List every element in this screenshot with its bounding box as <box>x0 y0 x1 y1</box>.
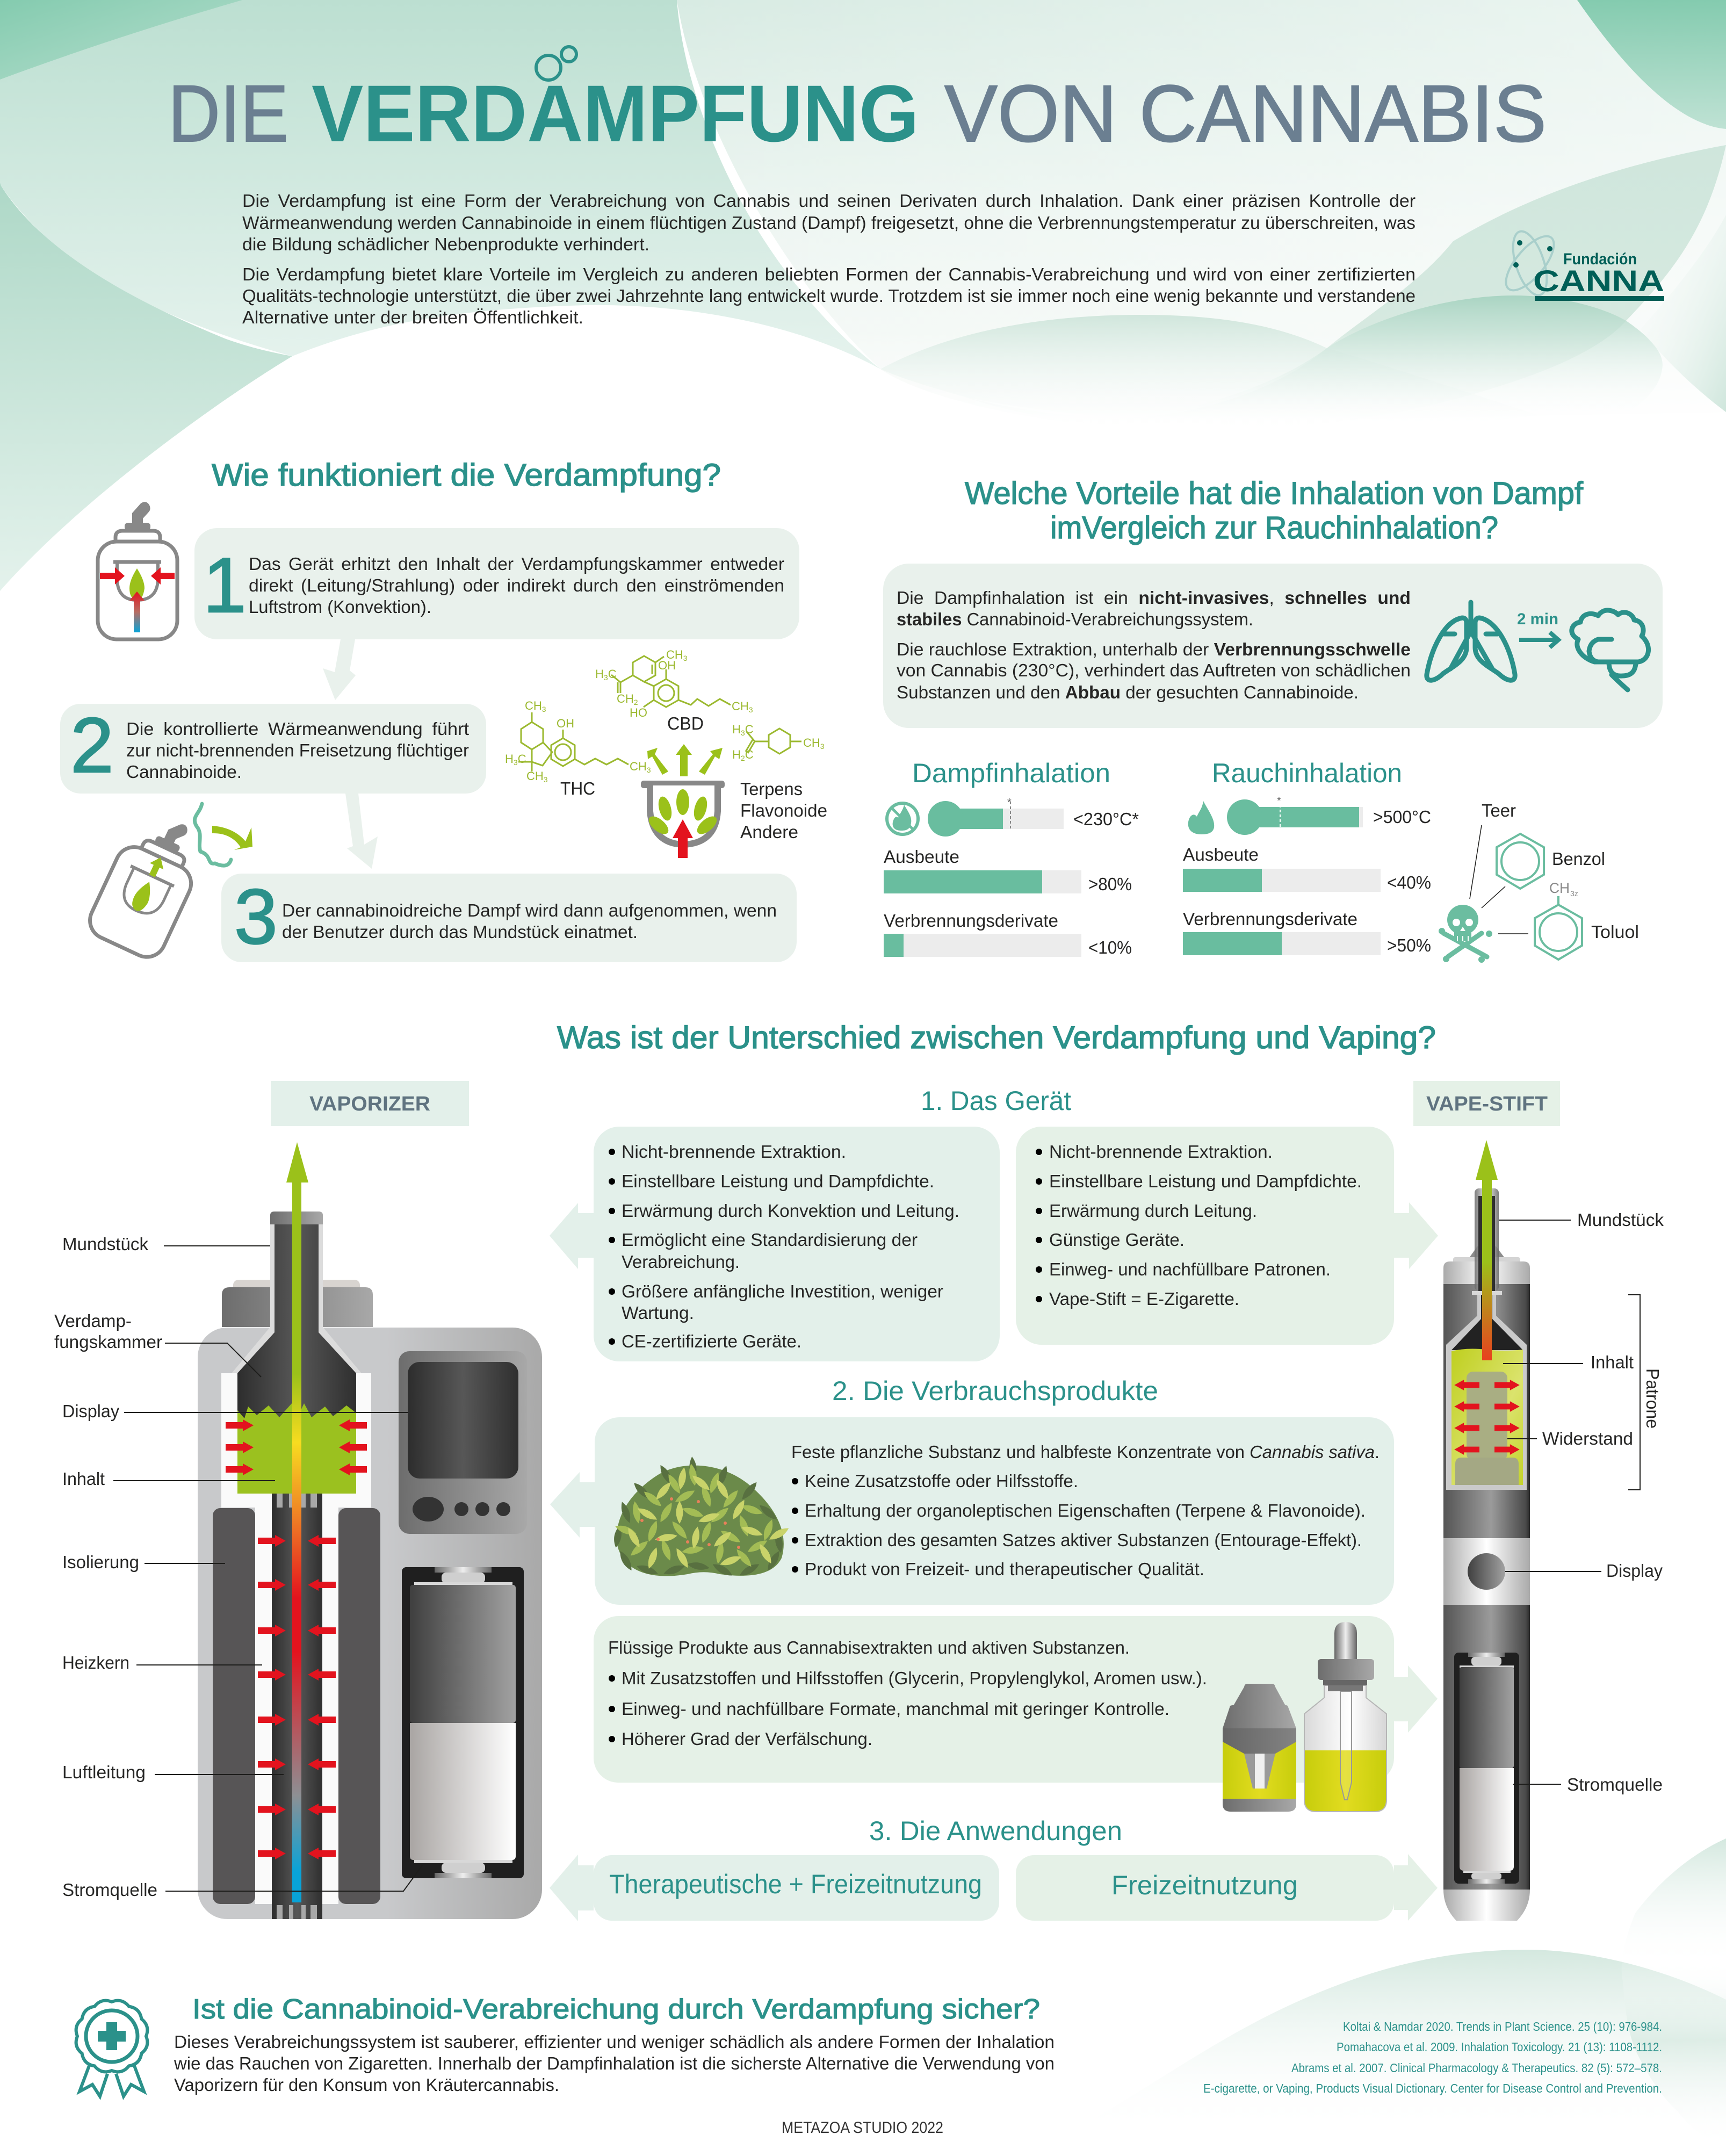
title <box>168 68 1547 158</box>
panel: liquid products: Höherer Grad der Verfälschung. <box>622 1729 872 1749</box>
vape pen part labels: Stromquelle <box>1567 1775 1663 1794</box>
molecule: CBD: 3 <box>604 673 608 682</box>
panel: step 1: Das Gerät erhitzt den Inhalt der Verdampfungskammer entweder <box>249 554 784 574</box>
panel: vapour inhalation advantages: Die Dampfinhalation ist ein nicht-invasives, schnelles und <box>897 588 1411 608</box>
heading: advantages: imVergleich zur Rauchinhalation? <box>1050 510 1498 545</box>
chart: Dampfinhalation: * <box>1007 797 1012 809</box>
arrow: air flow <box>286 1142 308 1902</box>
heading: advantages <box>965 476 1584 545</box>
labels: toxic compounds: Teer <box>1482 801 1516 820</box>
panel: vaporizer device features: Nicht-brennende Extraktion. <box>622 1142 846 1162</box>
panel: step 1 <box>194 528 799 639</box>
intro text: Wärmeanwendung werden Cannabinoide in einem flüchtigen Zustand (Dampf) freigesetzt, ohne die Verbrennungstemperatur zu überschreiten, was <box>242 213 1416 233</box>
labels: toxic compounds <box>1470 801 1639 960</box>
molecule: terpene <box>732 723 825 762</box>
molecule: CBD: CH <box>732 700 749 713</box>
icon: safety badge <box>76 2001 147 2096</box>
vaporizer part labels: Mundstück <box>62 1234 148 1254</box>
panel: vaporizer device features: Verabreichung. <box>622 1252 740 1272</box>
panel: step 1: 1 <box>203 542 247 629</box>
icon: no flame <box>887 803 918 834</box>
logo: Fundación CANNA: Fundación <box>1563 250 1637 268</box>
panel: step 3: Der cannabinoidreiche Dampf wird dann aufgenommen, wenn <box>282 900 777 920</box>
panel: herbal products <box>595 1417 1394 1605</box>
vaporizer part labels: Inhalt <box>62 1469 105 1489</box>
panel: step 2: 2 <box>70 702 114 789</box>
vaporizer part labels: fungskammer <box>54 1332 162 1352</box>
chart: Dampfinhalation: Verbrennungsderivate <box>884 911 1058 931</box>
intro text: Die Verdampfung ist eine Form der Verabreichung von Cannabis und seinen Derivaten durch Inhalation. Dank einer präzisen Kontrolle der <box>242 191 1416 211</box>
diagram: vape pen <box>1443 1140 1530 1921</box>
vape pen part labels <box>1499 1210 1664 1794</box>
panel: vape pen device features: Einstellbare Leistung und Dampfdichte. <box>1049 1171 1362 1191</box>
panel: vape pen device features <box>1016 1127 1394 1345</box>
panel: vapour inhalation advantages: Die rauchlose Extraktion, unterhalb der Verbrennungsschwelle <box>897 639 1411 659</box>
panel: vape pen device features: Einweg- und nachfüllbare Patronen. <box>1049 1259 1331 1279</box>
molecule: THC: THC <box>560 778 595 798</box>
chart: Rauchinhalation: * <box>1277 795 1281 807</box>
cartridge <box>1446 1295 1527 1490</box>
molecule: THC: CH <box>525 699 542 712</box>
panel: vaporizer device features: Erwärmung durch Konvektion und Leitung. <box>622 1201 959 1221</box>
molecule: THC: CH <box>630 760 647 773</box>
vaporizer part labels: Stromquelle <box>62 1880 157 1900</box>
icon: vapour bubbles <box>536 47 576 80</box>
molecule: THC: 3 <box>647 766 651 774</box>
vape pen part labels: Display <box>1606 1561 1663 1581</box>
diagram: vaporizer <box>198 1142 542 1919</box>
molecule: terpene: H <box>732 723 741 736</box>
title: DIE <box>168 68 288 158</box>
molecule: CBD: HO <box>630 706 647 719</box>
arrow: step 2 to 3 <box>345 794 378 869</box>
arrow: application vaporizer <box>550 1855 594 1921</box>
panel: vapour inhalation advantages: Substanzen und den Abbau der gesuchten Cannabinoide. <box>897 682 1359 702</box>
panel: vapour inhalation advantages <box>883 564 1663 728</box>
chart: Dampfinhalation: <10% <box>1088 938 1132 957</box>
panel: vaporizer device features: Ermöglicht eine Standardisierung der <box>622 1230 918 1250</box>
molecule: terpene: 3 <box>820 742 825 751</box>
illustration: vape cartridge <box>1223 1684 1296 1812</box>
icon: flame <box>1188 801 1214 834</box>
vaporizer part labels: Verdamp- <box>54 1311 132 1331</box>
arrow: device vaporizer <box>550 1203 594 1269</box>
panel: step 3 <box>221 873 797 962</box>
panel: herbal products: Produkt von Freizeit- und therapeutischer Qualität. <box>805 1559 1204 1579</box>
labels: other compounds: Andere <box>740 822 798 842</box>
panel: herbal products: Feste pflanzliche Substanz und halbfeste Konzentrate von Cannabis sativa. <box>791 1442 1380 1462</box>
heading: consumables: 2. Die Verbrauchsprodukte <box>832 1376 1158 1406</box>
molecule: THC: C <box>518 752 526 766</box>
chart: Rauchinhalation: Verbrennungsderivate <box>1183 909 1357 929</box>
heat arrows <box>1454 1380 1520 1455</box>
background: bottom right waves <box>1095 1838 1726 2149</box>
battery <box>402 1567 524 1878</box>
labels: toxic compounds: CH <box>1549 880 1570 896</box>
tag: vaporizer: VAPORIZER <box>309 1093 430 1115</box>
molecule: terpene: 2 <box>741 754 745 762</box>
title: VON CANNABIS <box>944 68 1547 158</box>
intro text: Die Verdampfung bietet klare Vorteile im Vergleich zu anderen beliebten Formen der Cannabis-Verabreichung und wird von einer zertifizierten <box>242 264 1416 284</box>
vaporizer part labels: Heizkern <box>62 1653 129 1672</box>
molecule: CBD: CH <box>617 692 634 705</box>
chart: Rauchinhalation: >500°C <box>1373 807 1431 827</box>
molecule: terpene: H <box>732 748 741 761</box>
illustration: dropper bottle <box>1304 1622 1386 1812</box>
panel: liquid products <box>594 1616 1394 1783</box>
heat arrows <box>226 1419 367 1859</box>
text: safety answer: wie das Rauchen von Zigaretten. Innerhalb der Dampfinhalation ist die sicherste Alternative die Verwendung von <box>174 2053 1055 2073</box>
molecule: THC: CH <box>526 769 544 783</box>
panel: vape pen device features: Nicht-brennende Extraktion. <box>1049 1142 1273 1162</box>
molecule: terpene: C <box>745 723 754 736</box>
display unit <box>399 1351 527 1534</box>
heading: difference: Was ist der Unterschied zwischen Verdampfung und Vaping? <box>557 1020 1436 1055</box>
text: safety answer <box>174 2032 1055 2095</box>
panel: vapour inhalation advantages: von Cannabis (230°C), verhindert das Auftreten von schädlichen <box>897 660 1411 680</box>
heading: the device: 1. Das Gerät <box>921 1086 1071 1116</box>
chart: Rauchinhalation <box>1183 758 1431 955</box>
vape pen part labels: Inhalt <box>1591 1352 1634 1372</box>
vape pen part labels: Mundstück <box>1577 1210 1664 1230</box>
molecule: CBD: CBD <box>667 713 704 733</box>
labels: other compounds: Terpens <box>740 779 803 799</box>
panel: vaporizer device features: CE-zertifizierte Geräte. <box>622 1331 801 1351</box>
panel: vapour inhalation advantages: stabiles Cannabinoid-Verabreichungssystem. <box>897 609 1253 629</box>
vaporizer part labels: Isolierung <box>62 1552 139 1572</box>
logo: Fundación CANNA: CANNA <box>1533 264 1664 298</box>
panel: liquid products: Flüssige Produkte aus Cannabisextrakten und aktiven Substanzen. <box>608 1638 1130 1657</box>
arrow: application vape pen <box>1394 1854 1438 1921</box>
icon: brain <box>1572 610 1649 690</box>
labels: other compounds: Flavonoide <box>740 801 827 820</box>
references: Abrams et al. 2007. Clinical Pharmacology & Therapeutics. 82 (5): 572–578. <box>1291 2061 1662 2075</box>
chart: Dampfinhalation <box>884 758 1139 957</box>
molecule: CBD <box>595 648 753 733</box>
chart: Dampfinhalation: Ausbeute <box>884 847 959 867</box>
labels: toxic compounds: Benzol <box>1552 849 1605 869</box>
intro text: Qualitäts-technologie unterstützt, die über zwei Jahrzehnte lang entwickelt wurde. Trotzdem ist sie immer noch eine wenig bekannte und verstandene <box>242 286 1416 306</box>
arrow: step 1 to 2 <box>323 639 356 700</box>
molecule: CBD: H <box>595 667 604 681</box>
label: 2 min arrow: 2 min <box>1517 610 1558 628</box>
molecule: terpene: CH <box>803 736 820 749</box>
chart: Rauchinhalation: >50% <box>1387 935 1431 955</box>
molecule: CBD: 2 <box>634 698 638 706</box>
panel: vaporizer device features: Einstellbare Leistung und Dampfdichte. <box>622 1171 934 1191</box>
arrow: device vape pen <box>1394 1202 1438 1269</box>
panel: recreational use <box>1016 1855 1394 1921</box>
intro text <box>242 191 1416 327</box>
molecule: THC: 3 <box>544 775 548 784</box>
panel: step 3: 3 <box>234 873 278 960</box>
chart: Rauchinhalation: Ausbeute <box>1183 845 1259 864</box>
molecule: CBD: 3 <box>683 654 688 662</box>
panel: vape pen device features: Vape-Stift = E-Zigarette. <box>1049 1289 1239 1309</box>
intro text: Alternative unter der breiten Öffentlichkeit. <box>242 307 583 327</box>
panel: vaporizer device features: Größere anfängliche Investition, weniger <box>622 1281 943 1301</box>
illustration: cannabis bush <box>612 1456 790 1578</box>
icon: heated bowl with rising compounds <box>641 744 725 858</box>
panel: herbal products: Erhaltung der organoleptischen Eigenschaften (Terpene & Flavonoide). <box>805 1501 1366 1520</box>
vaporizer part labels <box>54 1234 422 1900</box>
references: Pomahacova et al. 2009. Inhalation Toxicology. 21 (13): 1108-1112. <box>1337 2040 1662 2054</box>
text: safety answer: Dieses Verabreichungssystem ist sauberer, effizienter und weniger schädlich als andere Formen der Inhalation <box>174 2032 1055 2052</box>
arrow: liquid product <box>1394 1665 1438 1733</box>
text: safety answer: Vaporizern für den Konsum von Kräutercannabis. <box>174 2075 559 2095</box>
molecule: CBD: 3 <box>749 705 753 714</box>
molecule: THC: 3 <box>542 705 546 713</box>
panel: vaporizer device features <box>594 1127 1000 1361</box>
battery <box>1454 1653 1519 1884</box>
molecule: THC: H <box>505 752 514 766</box>
molecule: THC: 3 <box>514 758 518 767</box>
heading: is it safe: Ist die Cannabinoid-Verabreichung durch Verdampfung sicher? <box>192 1994 1040 2025</box>
chart: Dampfinhalation: Dampfinhalation <box>912 758 1110 788</box>
molecule: CBD: OH <box>658 659 676 672</box>
panel: step 2 <box>60 702 486 794</box>
references: Koltai & Namdar 2020. Trends in Plant Science. 25 (10): 976-984. <box>1343 2020 1662 2034</box>
molecule: CBD: CH <box>666 648 683 661</box>
icon: vaporizer heating <box>98 502 177 639</box>
labels: other compounds <box>740 779 827 842</box>
tag: vape pen <box>1413 1081 1560 1126</box>
chart: Rauchinhalation: Rauchinhalation <box>1212 758 1402 788</box>
labels: toxic compounds: Toluol <box>1591 922 1639 942</box>
vaporizer part labels: Luftleitung <box>62 1762 146 1782</box>
panel: vaporizer device features: Wartung. <box>622 1303 694 1323</box>
panel: step 2: Die kontrollierte Wärmeanwendung führt <box>126 719 469 739</box>
logo: Fundación CANNA <box>1498 227 1664 301</box>
heading: how it works: Wie funktioniert die Verdampfung? <box>212 458 721 493</box>
chart: Dampfinhalation: <230°C* <box>1073 809 1139 829</box>
tag: vaporizer <box>271 1081 469 1126</box>
panel: liquid products: Einweg- und nachfüllbare Formate, manchmal mit geringer Kontrolle. <box>622 1699 1169 1719</box>
panel: step 3: der Benutzer durch das Mundstück einatmet. <box>282 922 638 942</box>
panel: therapeutic and recreational use <box>594 1855 999 1921</box>
molecule: terpene: 3 <box>741 729 745 737</box>
panel: vape pen device features: Günstige Geräte. <box>1049 1230 1185 1250</box>
content: plant material <box>237 1402 356 1494</box>
label: 2 min arrow <box>1517 610 1558 647</box>
vaporizer part labels: Display <box>62 1401 119 1421</box>
molecule: CBD: C <box>608 667 617 681</box>
panel: step 1: Luftstrom (Konvektion). <box>249 597 431 617</box>
molecule: THC <box>505 699 651 798</box>
vape pen part labels: Patrone <box>1643 1368 1663 1429</box>
molecule: terpene: C <box>745 748 754 761</box>
heading: applications: 3. Die Anwendungen <box>869 1816 1122 1846</box>
panel: recreational use: Freizeitnutzung <box>1111 1870 1298 1900</box>
molecule: THC: OH <box>557 717 574 730</box>
panel: vape pen device features: Erwärmung durch Leitung. <box>1049 1201 1257 1221</box>
chart: Rauchinhalation: <40% <box>1387 873 1431 892</box>
intro text: die Bildung schädlicher Nebenprodukte verhindert. <box>242 234 649 254</box>
icon: lungs <box>1427 602 1515 680</box>
references <box>1203 2020 1662 2095</box>
panel: step 2: zur nicht-brennenden Freisetzung flüchtiger <box>126 740 469 760</box>
background: top green waves <box>0 0 1726 591</box>
panel: step 2: Cannabinoide. <box>126 762 242 782</box>
icon: skull and crossbones <box>1439 905 1492 963</box>
tag: vape pen: VAPE-STIFT <box>1426 1093 1548 1115</box>
credit: METAZOA STUDIO 2022 <box>782 2119 943 2137</box>
panel: herbal products: Extraktion des gesamten Satzes aktiver Substanzen (Entourage-Effekt). <box>805 1530 1362 1550</box>
labels: toxic compounds: 3z <box>1570 889 1578 898</box>
panel: step 1: direkt (Leitung/Strahlung) oder indirekt durch den einströmenden <box>249 575 784 595</box>
icon: inhaling device <box>84 804 252 963</box>
chart: Dampfinhalation: >80% <box>1088 874 1132 894</box>
heading: advantages: Welche Vorteile hat die Inhalation von Dampf <box>965 476 1584 511</box>
vape pen part labels: Widerstand <box>1542 1429 1633 1448</box>
title: VERDAMPFUNG <box>312 68 919 158</box>
panel: therapeutic and recreational use: Therapeutische + Freizeitnutzung <box>609 1869 982 1899</box>
panel: herbal products: Keine Zusatzstoffe oder Hilfsstoffe. <box>805 1471 1078 1491</box>
arrow: herbal product <box>550 1472 595 1538</box>
arrow: vapour flow <box>1476 1140 1498 1360</box>
panel: liquid products: Mit Zusatzstoffen und Hilfsstoffen (Glycerin, Propylenglykol, Aromen usw.). <box>622 1668 1207 1688</box>
references: E-cigarette, or Vaping, Products Visual Dictionary. Center for Disease Control and Prevention. <box>1203 2081 1662 2095</box>
